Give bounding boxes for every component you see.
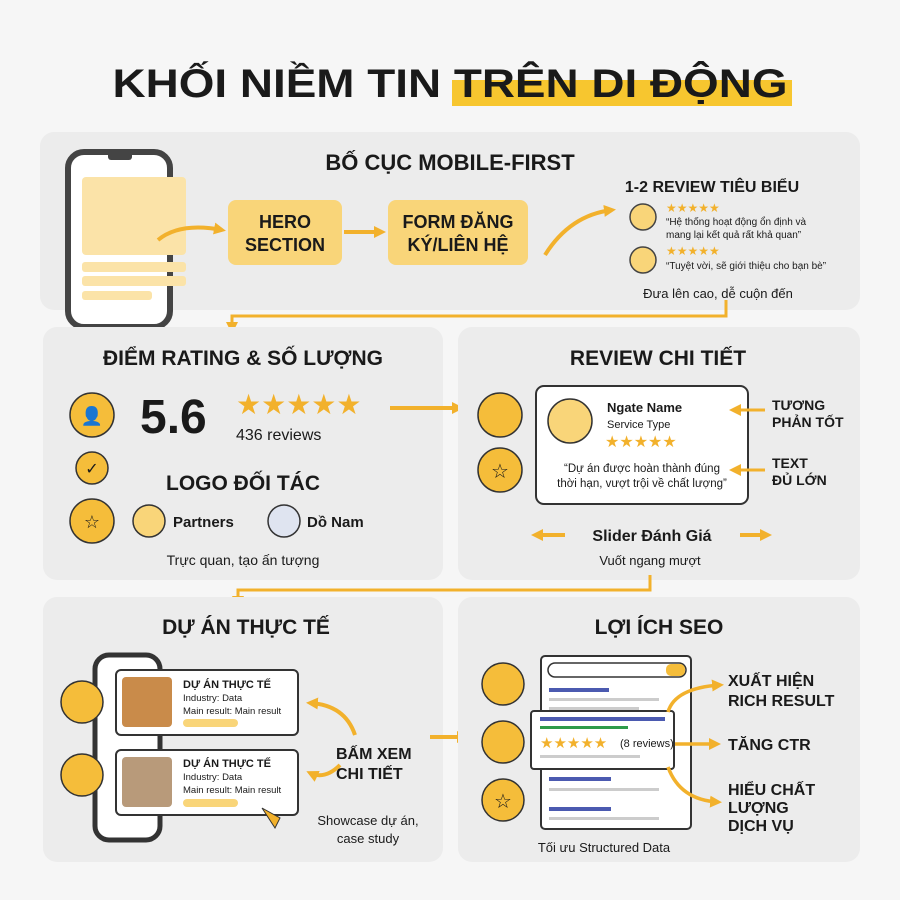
- panel: review detail: Slider Đánh Giá: [592, 528, 712, 545]
- box: form: FORM ĐĂNG: [402, 211, 514, 232]
- panel: SEO: LỢI ÍCH SEO: [595, 616, 723, 639]
- panel: rating: 436 reviews: [236, 427, 321, 444]
- review list: “Tuyệt vời, sẽ giới thiệu cho bạn bè”: [666, 261, 826, 272]
- heading: BỐ CỤC MOBILE-FIRST: [325, 149, 575, 175]
- box: hero section: HERO: [259, 212, 311, 232]
- panel: projects: DỰ ÁN THỰC TẾ: [183, 678, 271, 691]
- box: form: KÝ/LIÊN HỆ: [407, 234, 509, 255]
- panel: SEO: ★★★★★: [540, 735, 607, 752]
- panel: rating: Partners: [173, 514, 234, 531]
- panel: projects: Main result: Main result: [183, 785, 282, 796]
- panel: rating: [43, 327, 443, 580]
- arrow: [344, 230, 382, 234]
- panel: rating: Trực quan, tạo ấn tượng: [167, 552, 319, 568]
- panel: review detail: ĐỦ LỚN: [772, 471, 827, 488]
- panel: projects: DỰ ÁN THỰC TẾ: [183, 757, 271, 770]
- connector arrow: [232, 300, 726, 330]
- panel: SEO: TĂNG CTR: [728, 735, 811, 754]
- panel: SEO: (8 reviews): [620, 738, 674, 750]
- review list: Đưa lên cao, dễ cuộn đến: [643, 286, 793, 301]
- review list: “Hệ thống hoạt động ổn định và: [666, 216, 807, 228]
- panel: SEO: ☆: [494, 791, 512, 813]
- panel: rating: ☆: [84, 512, 100, 532]
- panel: SEO: [458, 597, 860, 862]
- panel: review detail: Ngate Name: [607, 400, 682, 415]
- panel: review detail: “Dự án được hoàn thành đúng: [564, 463, 720, 475]
- panel: review detail: TƯƠNG: [772, 397, 825, 413]
- review list: ★★★★★: [666, 201, 720, 215]
- panel: review detail: ☆: [491, 461, 509, 483]
- panel: rating: LOGO ĐỐI TÁC: [166, 471, 320, 495]
- panel: rating: ✓: [85, 461, 99, 478]
- panel: projects: case study: [337, 831, 400, 846]
- panel: rating: 5.6: [140, 391, 207, 444]
- box: hero section: SECTION: [245, 235, 325, 255]
- panel: review detail: REVIEW CHI TIẾT: [570, 347, 746, 370]
- panel: SEO: DỊCH VỤ: [728, 818, 794, 835]
- panel: review detail: [458, 327, 860, 580]
- review list: mang lại kết quả rất khả quan”: [666, 229, 801, 241]
- panel: review detail: TEXT: [772, 455, 808, 471]
- arrow: [545, 210, 612, 255]
- panel: SEO: Tối ưu Structured Data: [538, 840, 671, 855]
- panel: projects: Showcase dự án,: [317, 813, 419, 828]
- panel: review detail: Service Type: [607, 419, 670, 431]
- panel: rating: ★★★★★: [236, 389, 362, 420]
- panel: rating: Dồ Nam: [307, 514, 364, 531]
- panel: review detail: Vuốt ngang mượt: [599, 553, 701, 568]
- panel: projects: DỰ ÁN THỰC TẾ: [162, 616, 330, 639]
- panel: SEO: XUẤT HIỆN: [728, 671, 814, 690]
- panel: projects: Industry: Data: [183, 693, 243, 704]
- box: form: [388, 200, 528, 265]
- panel: projects: [43, 597, 443, 862]
- panel: review detail: PHẢN TỐT: [772, 413, 844, 430]
- connector arrow: [238, 575, 650, 604]
- panel: rating: ĐIỂM RATING & SỐ LƯỢNG: [103, 346, 383, 370]
- icon: phone: [68, 152, 186, 327]
- panel: projects: CHI TIẾT: [336, 764, 403, 783]
- panel: projects: Industry: Data: [183, 772, 243, 783]
- panel: SEO: LƯỢNG: [728, 800, 789, 817]
- box: hero section: [228, 200, 342, 265]
- arrow: [158, 228, 222, 240]
- panel: mobile-first: [40, 132, 860, 327]
- panel: rating: 👤: [81, 405, 103, 426]
- panel: review detail: ★★★★★: [605, 434, 677, 451]
- panel: projects: Main result: Main result: [183, 706, 282, 717]
- title: KHỐI NIỀM TIN TRÊN DI ĐỘNG: [112, 60, 788, 106]
- arrow: [390, 406, 460, 410]
- panel: review detail: thời hạn, vượt trội về chất lượng”: [557, 478, 727, 490]
- review list: ★★★★★: [666, 244, 720, 258]
- panel: SEO: RICH RESULT: [728, 693, 835, 710]
- review list: [625, 177, 826, 301]
- panel: SEO: HIỂU CHẤT: [728, 780, 815, 799]
- arrow: [430, 735, 465, 739]
- review list: 1-2 REVIEW TIÊU BIỂU: [625, 177, 799, 196]
- panel: projects: BẤM XEM: [336, 744, 412, 763]
